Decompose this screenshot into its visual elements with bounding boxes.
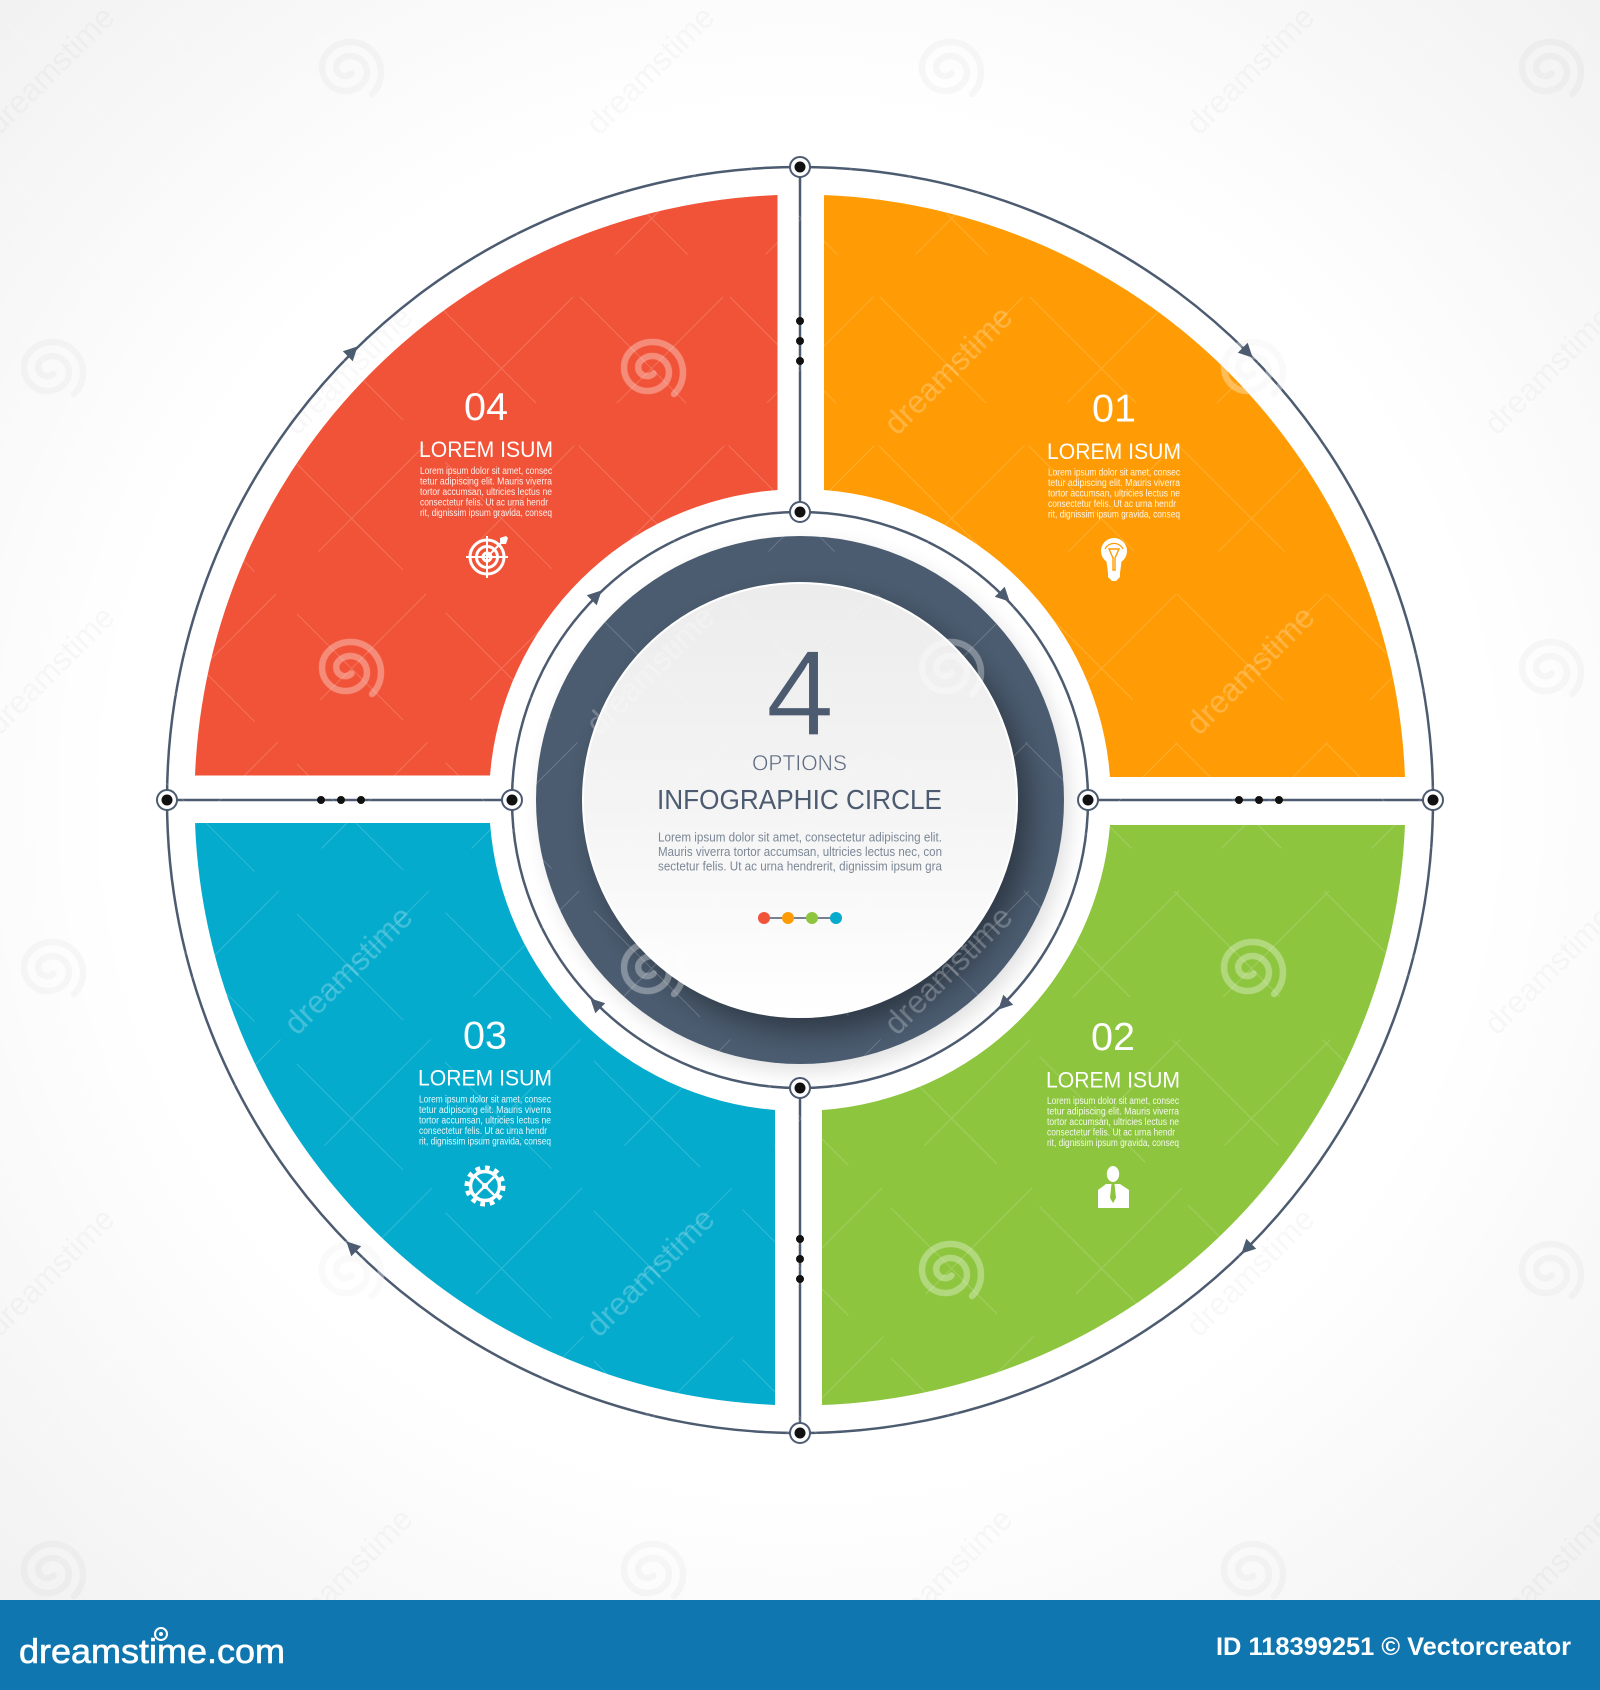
panel: segment 04 red (195, 195, 778, 776)
node: left outer (157, 790, 177, 810)
icon: gear (467, 1168, 503, 1204)
body 01: tortor accumsan, ultricies lectus ne (1048, 488, 1180, 500)
body 03: Lorem ipsum dolor sit amet, consec (419, 1094, 551, 1106)
body 04: tortor accumsan, ultricies lectus ne (420, 487, 552, 498)
footer credit: ID 118399251 © Vectorcreator (1216, 1633, 1571, 1661)
number 04: 04 (464, 386, 508, 429)
body 01: consectetur felis. Ut ac urna hendr (1048, 499, 1177, 510)
label options: OPTIONS (752, 750, 847, 776)
body 03: consectetur felis. Ut ac urna hendr (419, 1126, 548, 1137)
node: left inner (502, 790, 522, 810)
footer bar (0, 1600, 1600, 1690)
body 04: Lorem ipsum dolor sit amet, consec (420, 466, 552, 477)
watermark: grey layer on background: dreamstime (277, 299, 419, 441)
arrows on outer and inner rings (341, 341, 1258, 1259)
body 03: tetur adipiscing elit. Mauris viverra (419, 1105, 551, 1116)
body 01: tetur adipiscing elit. Mauris viverra (1048, 478, 1180, 489)
body 02: tetur adipiscing elit. Mauris viverra (1047, 1106, 1179, 1118)
number 03: 03 (463, 1014, 507, 1058)
body 02: rit, dignissim ipsum gravida, conseq (1047, 1138, 1179, 1149)
center paragraph: Mauris viverra tortor accumsan, ultricies lectus nec, con (658, 845, 942, 859)
watermark: grey layer on background: dreamstime (1179, 1201, 1321, 1343)
node: bottom inner (790, 1078, 810, 1098)
body 03 (419, 1094, 551, 1148)
text block: option 01 (1047, 388, 1181, 520)
node: bottom outer (790, 1423, 810, 1443)
body 04: consectetur felis. Ut ac urna hendr (420, 498, 549, 508)
nodes on spokes (157, 157, 1443, 1443)
icon: business person (1098, 1166, 1129, 1208)
body 03: tortor accumsan, ultricies lectus ne (419, 1116, 551, 1126)
watermark: grey layer on background: dreamstime (277, 1501, 419, 1643)
text block: option 03 (418, 1014, 552, 1148)
watermark: grey layer on background: dreamstime (579, 0, 721, 141)
connector rings and spokes (167, 167, 1433, 1433)
central white disc (583, 583, 1017, 1017)
watermark: white layer over segments: dreamstime (1179, 599, 1321, 741)
text block: option 04 (419, 386, 553, 519)
watermark: white layer over segments: dreamstime (877, 899, 1019, 1041)
center paragraph (658, 830, 942, 874)
icon: target (466, 536, 508, 578)
node: top outer (790, 157, 810, 177)
body 02: consectetur felis. Ut ac urna hendr (1047, 1128, 1176, 1138)
node: right inner (1078, 790, 1098, 810)
legend dots (758, 912, 842, 924)
body 01: rit, dignissim ipsum gravida, conseq (1048, 510, 1180, 520)
central dark ring (536, 536, 1064, 1064)
body 04: tetur adipiscing elit. Mauris viverra (420, 476, 552, 488)
big number 4: 4 (766, 625, 834, 761)
heading 02: LOREM ISUM (1046, 1068, 1180, 1092)
body 02: Lorem ipsum dolor sit amet, consec (1047, 1096, 1179, 1107)
heading 04: LOREM ISUM (419, 437, 553, 462)
icon: light bulb (1101, 538, 1127, 581)
watermark: white layer over segments: dreamstime (277, 899, 419, 1041)
body 04 (420, 466, 552, 519)
panel: segment 01 orange (824, 195, 1405, 777)
center paragraph: sectetur felis. Ut ac urna hendrerit, dignissim ipsum gra (658, 860, 942, 874)
panel: segment 03 teal (195, 823, 775, 1405)
heading 03: LOREM ISUM (418, 1066, 552, 1090)
center text block (657, 625, 942, 924)
body 03: rit, dignissim ipsum gravida, conseq (419, 1136, 551, 1148)
center title: INFOGRAPHIC CIRCLE (657, 784, 942, 815)
text block: option 02 (1046, 1016, 1180, 1149)
watermark: grey layer on background: dreamstime (877, 1501, 1019, 1643)
body 01 (1048, 468, 1180, 520)
body 02 (1047, 1096, 1179, 1149)
heading 01: LOREM ISUM (1047, 439, 1181, 464)
panel: segment 02 green (822, 825, 1405, 1405)
number 02: 02 (1091, 1016, 1135, 1059)
body 01: Lorem ipsum dolor sit amet, consec (1048, 468, 1180, 478)
center paragraph: Lorem ipsum dolor sit amet, consectetur adipiscing elit. (658, 830, 942, 844)
watermark: white layer over segments: dreamstime (579, 599, 721, 741)
node: top inner (790, 502, 810, 522)
watermark: white layer over segments: dreamstime (877, 299, 1019, 441)
node: right outer (1423, 790, 1443, 810)
watermark: grey layer on background: dreamstime (1179, 0, 1321, 141)
body 02: tortor accumsan, ultricies lectus ne (1047, 1117, 1179, 1128)
body 04: rit, dignissim ipsum gravida, conseq (420, 508, 552, 519)
number 01: 01 (1092, 388, 1136, 430)
triple dots on spokes (317, 317, 1283, 1283)
watermark: white layer over segments: dreamstime (579, 1201, 721, 1343)
footer logo: dreamstime.com (19, 1633, 285, 1671)
